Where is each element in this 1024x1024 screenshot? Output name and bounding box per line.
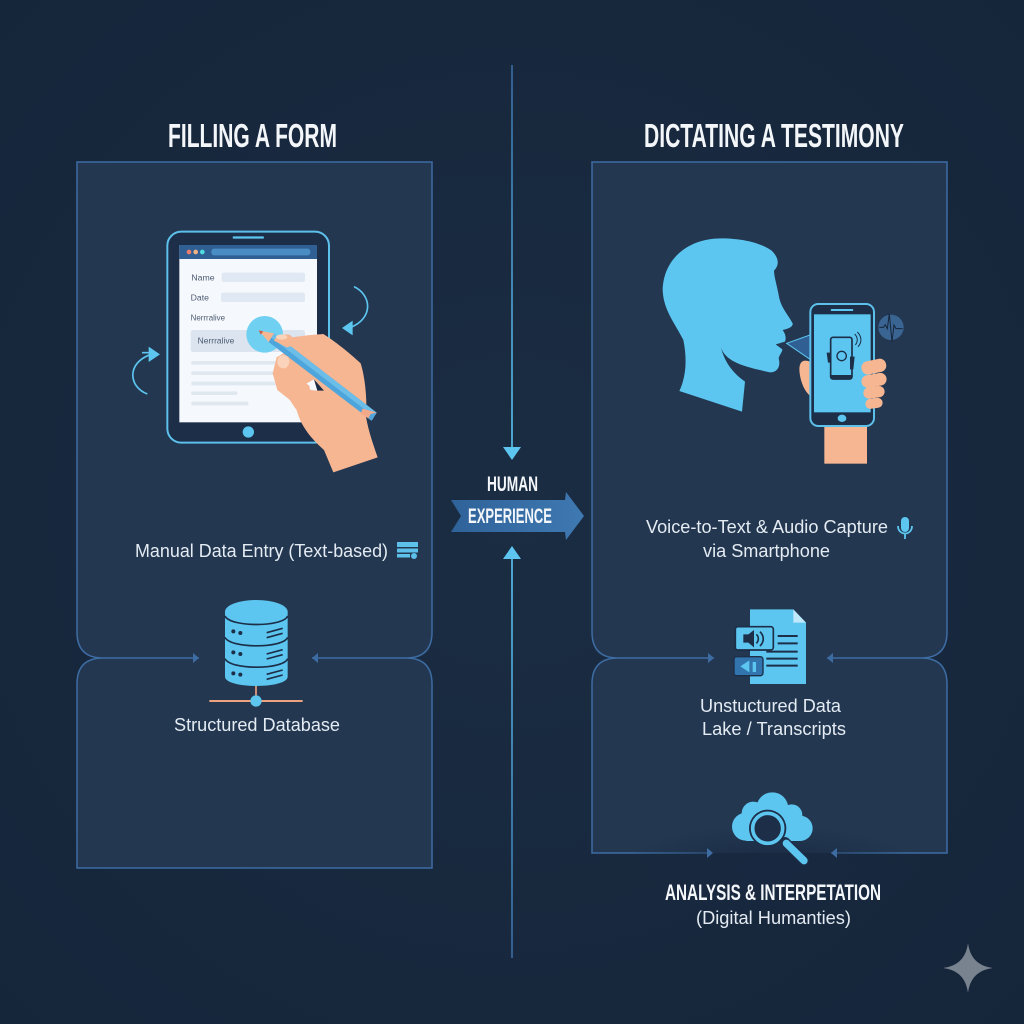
icon: microphone — [898, 517, 912, 539]
text: voice-to-text and audio capture: via Smartphone — [703, 541, 830, 561]
text: unstructured data lake — [700, 696, 846, 739]
icon: cloud with magnifying glass — [732, 792, 813, 861]
icon: sparkle — [943, 943, 993, 993]
icon: tablet with form and hand — [133, 232, 378, 472]
text: voice-to-text and audio capture — [646, 517, 888, 561]
panel: filling a form — [77, 162, 432, 868]
arrowheads into transcripts — [708, 653, 833, 663]
arrowheads into database — [193, 653, 318, 663]
icon: tablet with form and hand: Name — [191, 273, 215, 283]
text: unstructured data lake: Lake / Transcripts — [702, 719, 846, 739]
text: manual data entry: Manual Data Entry (Text-based) — [135, 541, 388, 561]
text: analysis and interpretation: ANALYSIS & INTERPETATION — [665, 880, 881, 905]
title: filling a form: FILLING A FORM — [168, 117, 337, 154]
human experience arrow label — [451, 473, 584, 540]
icon: audio files and transcript — [734, 609, 806, 684]
icon: form list — [397, 542, 418, 559]
human experience arrow label: HUMAN — [487, 473, 538, 496]
icon: tablet with form and hand: Nerrralive — [198, 336, 235, 346]
text: analysis and interpretation — [665, 880, 881, 928]
icon: tablet with form and hand: Nerrralive — [191, 312, 225, 322]
text: analysis and interpretation: (Digital Humanties) — [696, 908, 851, 928]
text: structured database: Structured Database — [174, 715, 340, 735]
center axis arrows — [503, 65, 521, 958]
panel: dictating a testimony — [592, 162, 947, 915]
text: voice-to-text and audio capture: Voice-to-Text & Audio Capture — [646, 517, 888, 537]
icon: tablet with form and hand: Date — [191, 293, 209, 303]
arrowheads at analysis — [707, 848, 837, 858]
icon: head speaking into smartphone — [663, 238, 904, 464]
icon: structured database — [209, 600, 303, 707]
human experience arrow label: EXPERIENCE — [468, 505, 552, 528]
text: unstructured data lake: Unstuctured Data — [700, 696, 842, 716]
